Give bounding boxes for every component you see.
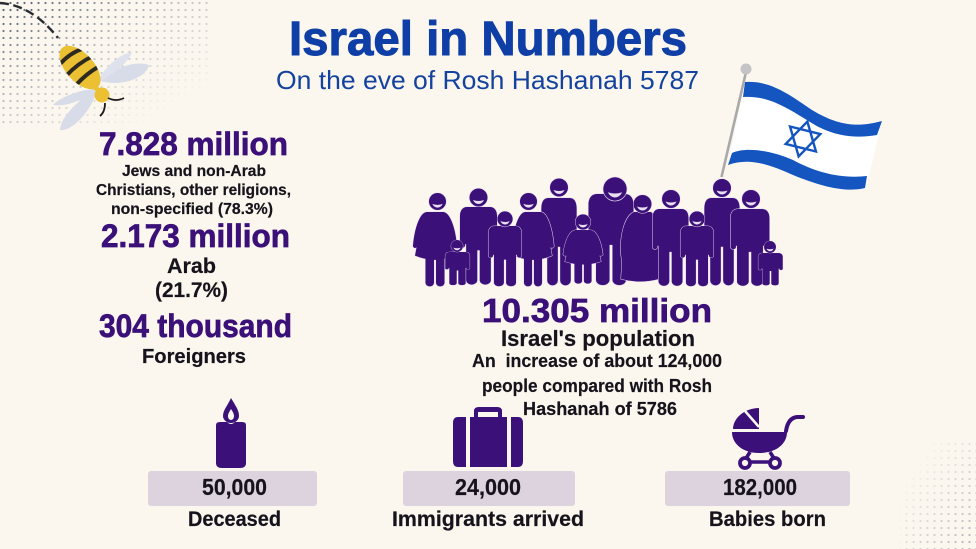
figure: man tall right: [704, 179, 740, 285]
panel: total population: [472, 292, 722, 419]
bar: 24,000: [403, 471, 575, 506]
figure: girl: [563, 214, 603, 284]
text: increase line 1: An increase of about 124,000: [472, 350, 722, 371]
value: 50,000: 50,000: [202, 474, 267, 500]
text: Foreigners: Foreigners: [142, 346, 246, 368]
panel: babies: [665, 408, 850, 531]
icon: crowd of people: [413, 177, 783, 286]
halftone dots top left: [0, 0, 210, 125]
figure: man right: [652, 190, 688, 286]
figure: woman second: [512, 193, 554, 286]
label: Deceased: Deceased: [188, 508, 281, 531]
icon: baby stroller: [732, 408, 803, 468]
subtitle: On the eve of Rosh Hashanah 5787: [276, 65, 699, 95]
stat: 304 thousand: 304 thousand: [99, 308, 292, 344]
figure: small child right: [758, 241, 783, 285]
text: 21.7%: (21.7%): [155, 279, 228, 302]
text: increase line 2: people compared with Rosh: [482, 375, 712, 396]
value: 182,000: 182,000: [723, 474, 797, 500]
label: Immigrants arrived: Immigrants arrived: [392, 508, 584, 531]
figure: man tall left: [541, 178, 577, 285]
text: increase line 3: Hashanah of 5786: [523, 398, 677, 419]
bar: 182,000: [665, 471, 850, 506]
icon: bee with dashed flight path: [0, 3, 149, 130]
text: non-specified: non-specified (78.3%): [111, 201, 273, 218]
title: Israel in Numbers: [289, 13, 687, 66]
panel: immigrants: [392, 407, 584, 531]
figure: boy: [488, 211, 522, 286]
stat: 7.828 million: 7.828 million: [99, 126, 288, 162]
value: 24,000: 24,000: [455, 474, 521, 500]
figure: man second: [460, 188, 497, 285]
stat: 10.305 million: 10.305 million: [482, 292, 712, 329]
text: Christians, other religions: Christians, other religions,: [96, 182, 291, 199]
icon: suitcase: [453, 407, 523, 467]
figure: big man: [588, 177, 634, 285]
figure: small child left: [445, 240, 470, 285]
text: Israel's population: Israel's population: [501, 326, 695, 351]
halftone dots bottom right: [900, 440, 976, 549]
panel: deceased: [148, 398, 317, 531]
text: Jews and non-Arab: Jews and non-Arab: [122, 163, 266, 180]
bar: 50,000: [148, 471, 317, 506]
panel: population breakdown: [96, 126, 292, 368]
icon: candle: [216, 398, 246, 468]
icon: Israeli flag: [722, 64, 882, 190]
text: Arab: Arab: [167, 255, 216, 278]
label: Babies born: Babies born: [709, 508, 826, 531]
figure: woman left: [413, 193, 457, 286]
stat: 2.173 million: 2.173 million: [101, 218, 290, 254]
figure: boy right: [680, 211, 714, 286]
figure: man far right: [731, 190, 769, 286]
figure: older woman: [621, 195, 659, 282]
